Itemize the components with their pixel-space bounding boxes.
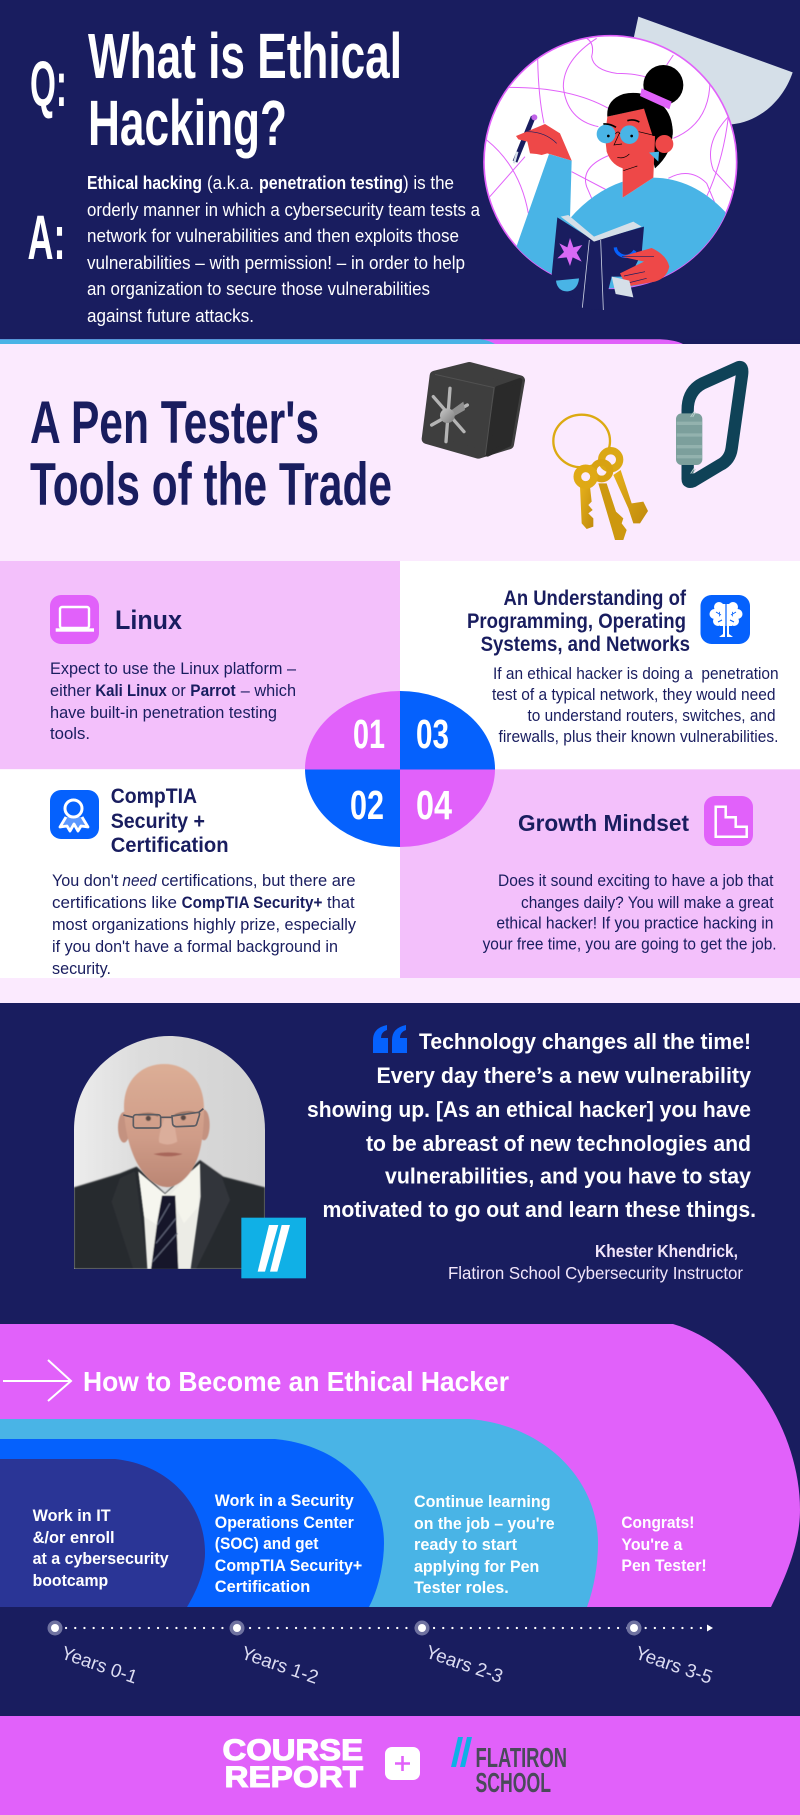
timeline labels	[58, 1642, 715, 1689]
text: Linux description: have built-in penetration testing	[50, 703, 277, 722]
step 4 text: Congrats!	[621, 1513, 694, 1532]
arc: step 1 indigo	[0, 1459, 205, 1607]
numbered centre badge	[305, 691, 495, 847]
heading: CompTIA Security + Certification: Security +	[111, 810, 205, 833]
heading: What is Ethical Hacking?	[88, 20, 402, 159]
numbered centre badge: 04	[416, 782, 452, 828]
arc: step 3 sky blue	[0, 1419, 598, 1607]
text: networks description: firewalls, plus their known vulnerabilities.	[498, 727, 778, 746]
label: Q: Q:	[30, 48, 67, 120]
icon: safe	[427, 367, 520, 455]
heading: How to Become an Ethical Hacker: How to Become an Ethical Hacker	[83, 1366, 509, 1397]
logo: Course Report	[222, 1734, 363, 1794]
icon: quotation mark	[373, 1025, 407, 1053]
text: Linux description: or	[171, 681, 186, 700]
text: quote: showing up. [As an ethical hacker] you have	[307, 1097, 751, 1122]
colour strip divider	[0, 339, 800, 344]
panel: Linux	[0, 561, 400, 769]
text: Linux description: Expect to use the Linux platform –	[50, 659, 297, 678]
numbered centre badge: 03	[416, 711, 449, 757]
step 4 text	[621, 1513, 707, 1575]
step 1 text: at a cybersecurity	[33, 1549, 169, 1568]
text: certification description: need	[122, 871, 157, 890]
step 3 text: on the job – you're	[414, 1514, 555, 1533]
panel: understanding of programming	[400, 561, 800, 769]
text: Linux description: – which	[241, 681, 296, 700]
step 3 text: Continue learning	[414, 1492, 550, 1511]
text block: definition of ethical hacking: (a.k.a.	[207, 173, 254, 193]
step 2 text	[215, 1491, 362, 1596]
step 4 text: Pen Tester!	[621, 1556, 707, 1575]
text block: definition of ethical hacking: network for vulnerabilities and then exploits those	[87, 226, 459, 246]
text block: definition of ethical hacking: against future attacks.	[87, 306, 254, 326]
step 3 text	[414, 1492, 555, 1597]
panel: CompTIA certification	[0, 770, 400, 978]
text: growth mindset description: your free time, you are going to get the job.	[483, 934, 777, 954]
timeline labels: Years 2-3	[423, 1642, 505, 1688]
text: networks description: If an ethical hacker is doing a penetration	[493, 664, 779, 683]
text block: definition of ethical hacking	[87, 173, 481, 326]
panel: pen tester's tools	[0, 344, 800, 1003]
text: attribution: Flatiron School Cybersecurity Instructor	[448, 1263, 743, 1283]
step 1 text: bootcamp	[33, 1571, 108, 1590]
heading: A Pen Tester's Tools of the Trade: Tools of the Trade	[30, 451, 392, 518]
heading: An Understanding of Programming, Operating Systems, and Networks: Programming, Operating	[467, 610, 686, 633]
logo: Flatiron School: SCHOOL	[476, 1767, 551, 1798]
step 3 text: applying for Pen	[414, 1557, 539, 1576]
text: certification description: certifications like	[52, 893, 177, 912]
text: attribution: Khester Khendrick,	[595, 1241, 738, 1261]
timeline labels: Years 1-2	[238, 1643, 321, 1689]
text: Linux description: either	[50, 681, 91, 700]
text block: definition of ethical hacking: ) is the	[403, 173, 454, 193]
heading: Growth Mindset: Growth Mindset	[518, 810, 689, 836]
heading: An Understanding of Programming, Operating Systems, and Networks	[467, 587, 690, 656]
text: Linux description	[50, 659, 297, 743]
panel: growth mindset	[400, 770, 800, 978]
text block: definition of ethical hacking: Ethical hacking	[87, 173, 202, 193]
heading: An Understanding of Programming, Operating Systems, and Networks: An Understanding of	[504, 587, 687, 610]
text: quote: vulnerabilities, and you have to stay	[385, 1164, 751, 1188]
heading: Linux: Linux	[115, 605, 182, 635]
panel: instructor quote	[74, 1025, 756, 1283]
text: certification description: if you don't have a formal background in	[52, 937, 338, 956]
text block: definition of ethical hacking: orderly manner in which a cybersecurity team tests a	[87, 200, 481, 220]
text: quote: to be abreast of new technologies and	[366, 1131, 751, 1156]
text block: definition of ethical hacking: vulnerabilities – with permission! – in order to help	[87, 253, 465, 273]
step 1 text: Work in IT	[33, 1506, 111, 1525]
timeline	[48, 1620, 713, 1636]
heading: An Understanding of Programming, Operating Systems, and Networks: Systems, and Networks	[481, 633, 690, 656]
logo: Course Report: COURSE	[222, 1734, 363, 1767]
text: networks description	[492, 664, 779, 746]
logo: Flatiron School	[451, 1737, 567, 1798]
heading: What is Ethical Hacking?: What is Ethical	[88, 20, 402, 92]
text: growth mindset description: Does it sound exciting to have a job that	[498, 871, 774, 890]
text: certification description	[52, 871, 356, 978]
text: quote	[307, 1029, 756, 1222]
footer: logos	[0, 1716, 800, 1815]
heading: What is Ethical Hacking?: Hacking?	[88, 87, 287, 159]
text: Linux description: Parrot	[190, 681, 236, 700]
step 1 text: &/or enroll	[33, 1528, 115, 1547]
timeline labels: Years 0-1	[58, 1643, 140, 1688]
text: networks description: test of a typical network, they would need	[492, 685, 776, 704]
heading: A Pen Tester's Tools of the Trade	[30, 389, 392, 518]
heading: CompTIA Security + Certification	[111, 785, 229, 857]
step 3 text: ready to start	[414, 1535, 517, 1554]
numbered centre badge: 01	[353, 711, 385, 757]
photo: Khester Khendrick portrait	[74, 1036, 265, 1269]
text: certification description: most organizations highly prize, especially	[52, 915, 356, 934]
heading: CompTIA Security + Certification: CompTIA	[111, 785, 197, 808]
icon: brain	[700, 595, 750, 644]
step 2 text: Operations Center	[215, 1513, 354, 1532]
heading: CompTIA Security + Certification: Certification	[111, 834, 229, 857]
timeline labels: Years 3-5	[632, 1643, 715, 1689]
icon: carabiner	[676, 367, 742, 482]
icon: plus	[385, 1747, 420, 1780]
step 4 text: You're a	[621, 1535, 683, 1554]
icon: ribbon badge	[50, 790, 99, 839]
text: certification description: You don't	[52, 871, 119, 890]
heading: A Pen Tester's Tools of the Trade: A Pen Tester's	[30, 389, 319, 456]
numbered centre badge: 02	[350, 782, 384, 828]
text: attribution	[448, 1241, 743, 1283]
logo tile: slashes	[241, 1218, 306, 1278]
text block: definition of ethical hacking: an organization to secure those vulnerabilities	[87, 279, 430, 299]
text: Linux description: Kali Linux	[95, 681, 167, 700]
panel: question and answer intro	[28, 17, 793, 326]
icon: stairs	[704, 796, 753, 846]
step 2 text: Work in a Security	[215, 1491, 354, 1510]
label: A: A:	[28, 203, 66, 273]
text: growth mindset description: ethical hacker! If you practice hacking in	[496, 914, 773, 932]
step 2 text: (SOC) and get	[215, 1534, 319, 1553]
arrow	[3, 1360, 71, 1401]
illustration: woman reading with pencil	[484, 17, 793, 310]
step 1 text	[33, 1506, 169, 1590]
logo: Flatiron School: FLATIRON	[476, 1742, 567, 1773]
text: certification description: that	[327, 893, 355, 912]
text block: definition of ethical hacking: penetration testing	[259, 173, 403, 193]
text: quote: Every day there’s a new vulnerability	[376, 1063, 751, 1088]
text: quote: motivated to go out and learn these things.	[322, 1197, 756, 1222]
text: certification description: security.	[52, 959, 111, 978]
step 2 text: CompTIA Security+	[215, 1556, 362, 1575]
text: certification description: CompTIA Security+	[182, 893, 322, 912]
text: growth mindset description	[483, 871, 777, 954]
logo: Course Report: REPORT	[224, 1761, 363, 1794]
step 3 text: Tester roles.	[414, 1578, 509, 1597]
panel: how to become an ethical hacker	[0, 1324, 800, 1689]
text: networks description: to understand routers, switches, and	[528, 706, 776, 725]
text: growth mindset description: changes daily? You will make a great	[521, 893, 774, 912]
text: certification description: certifications, but there are	[161, 871, 356, 890]
text: Linux description: tools.	[50, 724, 90, 743]
icon: laptop	[50, 595, 99, 644]
arc: step 4 pink	[0, 1324, 800, 1607]
arc: step 2 blue	[0, 1439, 384, 1607]
icon: keys	[553, 415, 648, 540]
text: quote: Technology changes all the time!	[419, 1029, 751, 1054]
step 2 text: Certification	[215, 1577, 310, 1596]
